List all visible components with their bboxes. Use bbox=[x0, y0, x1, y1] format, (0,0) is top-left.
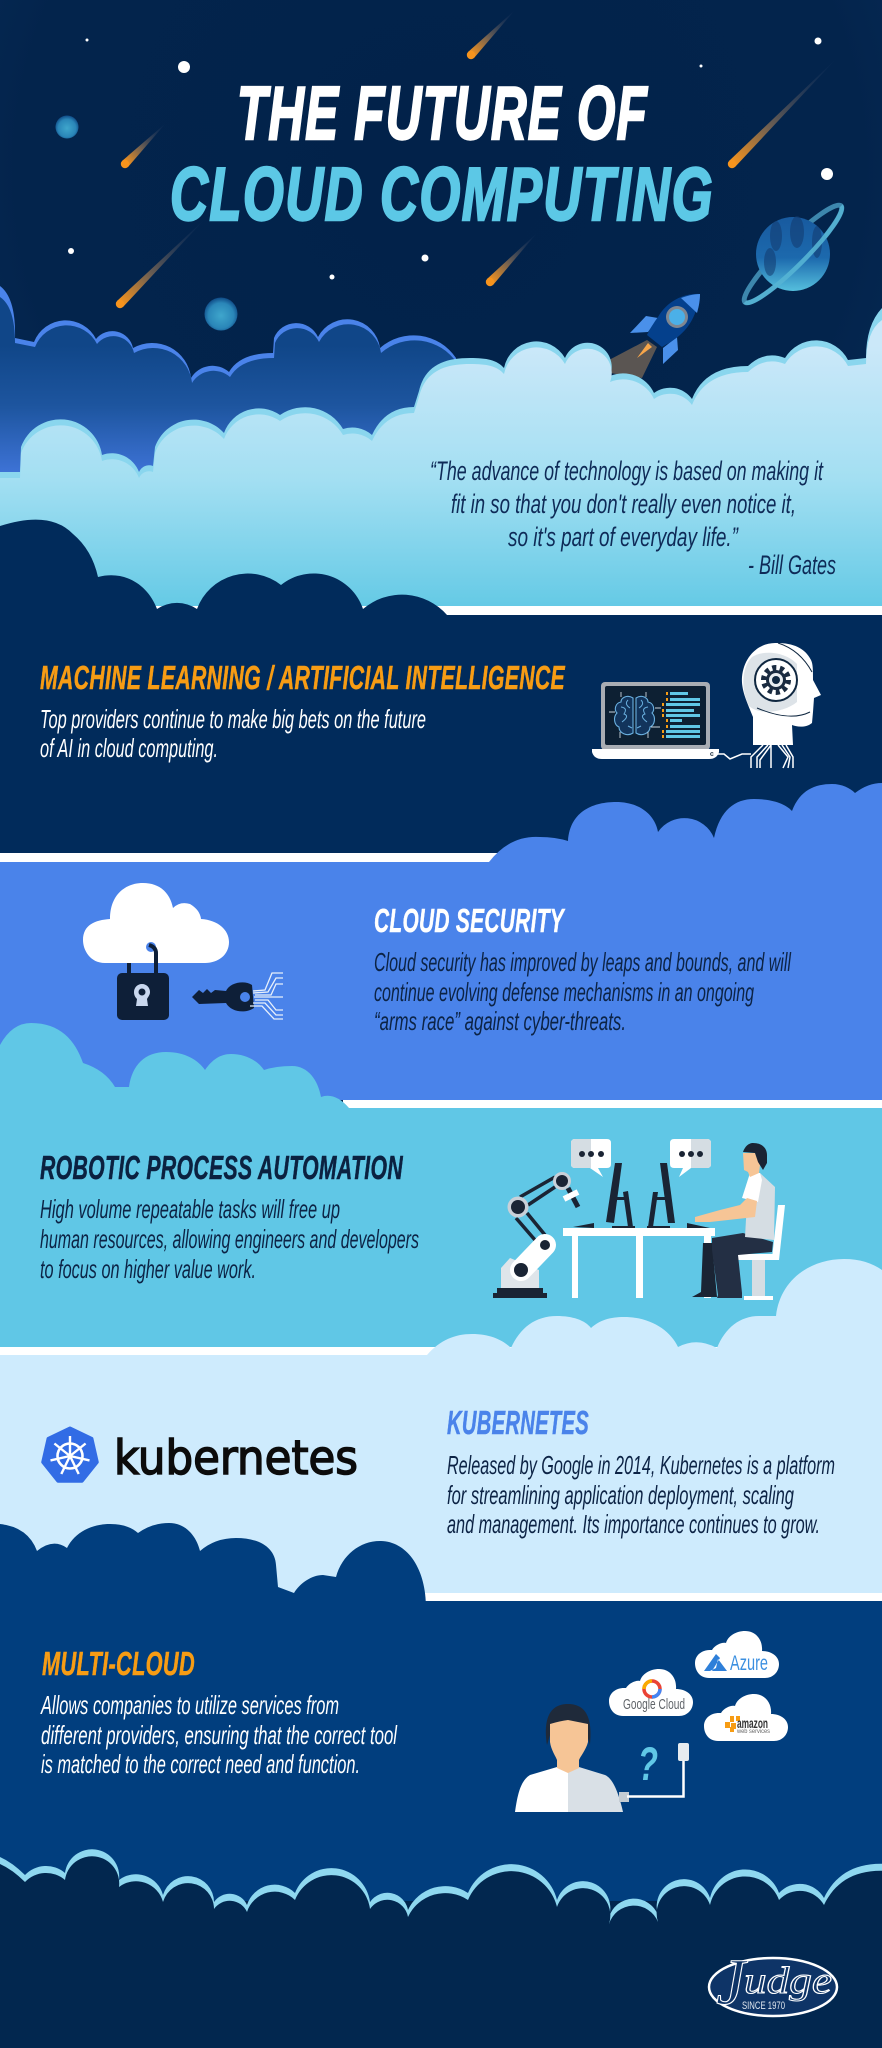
icon: Google Cloud: Google Cloud bbox=[623, 1696, 685, 1713]
quote: - Bill Gates bbox=[748, 550, 836, 580]
panel: robotic process automation bbox=[0, 1023, 882, 1355]
icon: Amazon Web Services cloud bbox=[704, 1694, 788, 1741]
icon: robot head with gear bbox=[711, 643, 821, 768]
icon: Amazon Web Services cloud: web services bbox=[736, 1729, 770, 1735]
body text: different providers, ensuring that the correct tool bbox=[41, 1720, 398, 1750]
icon: laptop with brain bbox=[592, 682, 719, 759]
panel: footer clouds bbox=[0, 1849, 882, 2048]
heading: KUBERNETES bbox=[447, 1404, 589, 1441]
icon: desk with monitors bbox=[563, 1163, 715, 1298]
heading: CLOUD SECURITY bbox=[374, 902, 566, 939]
logo: Judge: SINCE 1970 bbox=[742, 2000, 785, 2012]
body text bbox=[40, 704, 426, 763]
body text: human resources, allowing engineers and developers bbox=[40, 1224, 419, 1254]
logo: Judge: J bbox=[716, 1946, 748, 2019]
icon: small planet left bbox=[56, 116, 78, 138]
pale cloud bbox=[427, 1259, 882, 1360]
body text: is matched to the correct need and function. bbox=[41, 1749, 360, 1779]
body text: High volume repeatable tasks will free up bbox=[40, 1194, 340, 1224]
icon: cloud with lock bbox=[83, 883, 229, 1020]
body text: “arms race” against cyber-threats. bbox=[374, 1006, 626, 1036]
logo: kubernetes bbox=[43, 1428, 358, 1486]
icon: Google Cloud bbox=[609, 1669, 693, 1716]
quote bbox=[430, 456, 836, 580]
logo: Judge bbox=[709, 1946, 837, 2019]
heading: MACHINE LEARNING / ARTIFICIAL INTELLIGENCE bbox=[40, 659, 565, 696]
heading: MULTI-CLOUD bbox=[42, 1645, 195, 1682]
icon: Azure cloud: Azure bbox=[730, 1652, 768, 1675]
panel: kubernetes bbox=[0, 1259, 882, 1601]
body text bbox=[374, 947, 792, 1036]
dark blue cloud bbox=[0, 1523, 426, 1605]
icon: seated person bbox=[692, 1143, 785, 1300]
stars bbox=[68, 38, 833, 280]
heading: ROBOTIC PROCESS AUTOMATION bbox=[40, 1149, 403, 1186]
cloud edge bbox=[0, 1849, 882, 2048]
back cloud bbox=[0, 286, 471, 505]
icon: Amazon Web Services cloud: amazon bbox=[737, 1715, 768, 1731]
title bbox=[170, 71, 714, 236]
icon: small planet centre bbox=[204, 298, 238, 330]
icon: digital key bbox=[192, 973, 283, 1019]
cyan cloud bbox=[0, 1023, 349, 1115]
panel: cloud security bbox=[0, 783, 882, 1100]
icon: question mark: ? bbox=[638, 1737, 658, 1790]
body text bbox=[40, 1194, 419, 1284]
icon: cable and plug bbox=[619, 1743, 689, 1802]
title: THE FUTURE OF bbox=[237, 71, 648, 155]
icon: ringed planet bbox=[736, 197, 850, 311]
body text: Top providers continue to make big bets on the future bbox=[40, 704, 426, 734]
icon: rocket bbox=[609, 294, 700, 378]
panel: multi-cloud bbox=[0, 1523, 882, 1901]
body text bbox=[40, 1690, 398, 1779]
body text bbox=[447, 1450, 835, 1539]
icon: person bbox=[515, 1704, 623, 1812]
logo: Judge: udge bbox=[744, 1960, 832, 2002]
body text: Allows companies to utilize services from bbox=[40, 1690, 339, 1720]
body text: of AI in cloud computing. bbox=[40, 733, 218, 763]
foreground dark cloud bbox=[0, 520, 447, 620]
panel: hero sky bbox=[0, 0, 882, 616]
blue cloud bbox=[489, 783, 882, 870]
icon: Azure cloud bbox=[695, 1631, 779, 1678]
icon: robot arm bbox=[493, 1172, 578, 1298]
quote: so it's part of everyday life.” bbox=[508, 522, 739, 552]
panel: machine learning bbox=[0, 520, 882, 862]
logo: kubernetes: kubernetes bbox=[114, 1431, 358, 1486]
front light cloud bbox=[0, 308, 882, 606]
icon: speech bubbles bbox=[571, 1139, 711, 1177]
body text: to focus on higher value work. bbox=[40, 1254, 256, 1284]
meteors bbox=[116, 10, 838, 308]
